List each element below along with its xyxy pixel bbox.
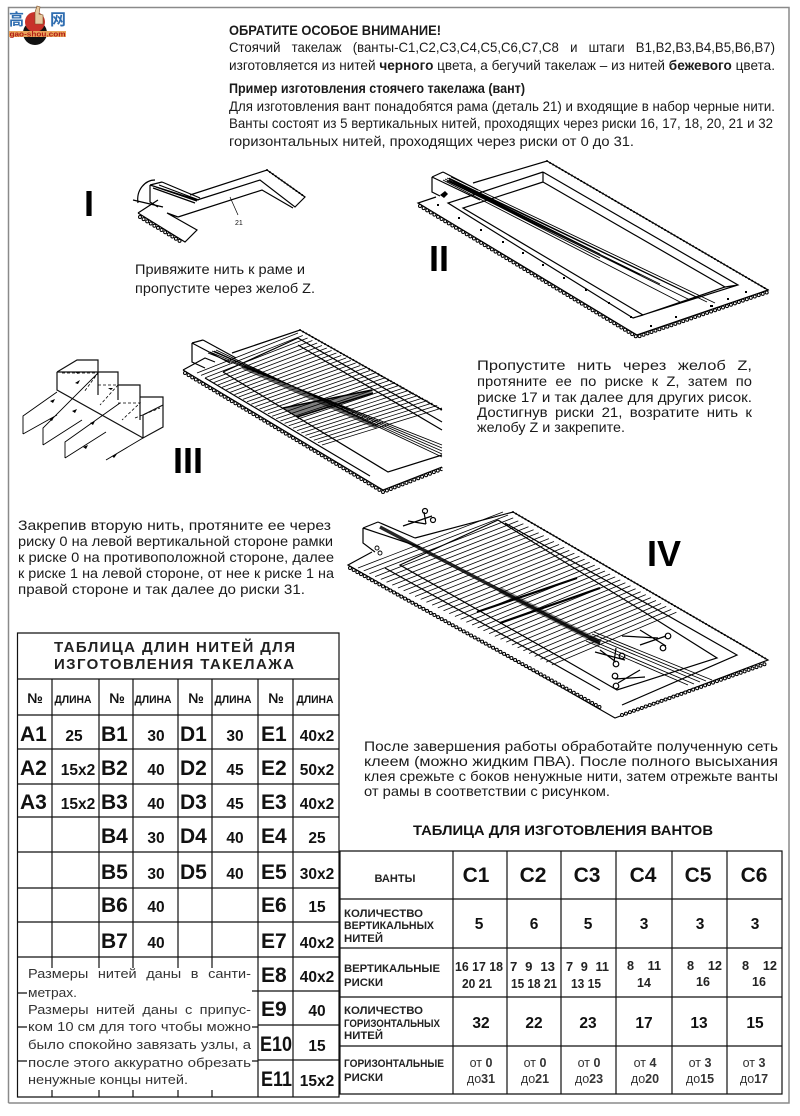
row: horizontal marks	[344, 1056, 768, 1086]
step II text: протяните ее по риске к Z, затем по	[477, 373, 752, 389]
column D: 40	[226, 866, 244, 883]
column D: D5	[180, 861, 207, 884]
row: vertical marks: ВЕРТИКАЛЬНЫЕ	[344, 963, 440, 975]
table: thread lengths	[18, 633, 339, 1097]
row: horizontal marks: до31	[467, 1072, 495, 1086]
table header row: ДЛИНА	[134, 694, 172, 706]
column B: B6	[101, 894, 128, 917]
step IV text: клеем (можно жидким ПВА). После полного высыхания	[364, 753, 778, 769]
row: vertical marks: 7 9 13	[510, 960, 555, 974]
column D: 30	[226, 728, 244, 745]
row: horizontal marks: до15	[686, 1072, 714, 1086]
column E: E5	[261, 861, 287, 884]
column D: D4	[180, 825, 207, 848]
column D	[180, 723, 244, 884]
logo: gao-shou.com	[9, 6, 66, 45]
column B	[101, 723, 165, 953]
row: horizontal thread count: 22	[525, 1015, 543, 1032]
column B: B5	[101, 861, 128, 884]
row: horizontal thread count: КОЛИЧЕСТВО	[344, 1005, 423, 1017]
column E: E11	[261, 1068, 292, 1091]
row: vertical thread count: КОЛИЧЕСТВО	[344, 908, 423, 920]
row: vertical marks: 16	[752, 975, 766, 989]
row: vertical marks: 13 15	[571, 977, 601, 991]
header row: С1	[463, 864, 490, 887]
heading: shroud table: ТАБЛИЦА ДЛЯ ИЗГОТОВЛЕНИЯ ВАНТОВ	[413, 823, 713, 838]
header row	[374, 864, 767, 887]
diagram: thread path over notches	[23, 360, 163, 460]
row: vertical thread count: 5	[475, 916, 484, 933]
column B: 30	[147, 866, 165, 883]
step number IV: IV	[647, 533, 681, 574]
row: horizontal marks: до21	[521, 1072, 549, 1086]
step II text: Достигнув риски 21, возратите нить к	[477, 404, 753, 420]
column B: B7	[101, 930, 128, 953]
step II text: риске 17 и так далее для других рисок.	[477, 389, 752, 405]
row: vertical thread count	[344, 908, 760, 945]
row: horizontal marks: ГОРИЗОНТАЛЬНЫЕ	[344, 1058, 444, 1070]
step IV text	[364, 738, 778, 799]
row: vertical thread count: 3	[751, 916, 760, 933]
scissors: top	[403, 508, 436, 526]
step IV text: После завершения работы обработайте полученную сеть	[364, 738, 778, 754]
diagram IV: frame with threads and scissors	[348, 508, 768, 718]
row: horizontal marks: до17	[740, 1072, 768, 1086]
table: shrouds	[340, 851, 782, 1094]
intro text: special attention	[229, 22, 775, 149]
step III text: правой стороне и так далее до риски 31.	[18, 581, 305, 597]
column A: 15x2	[61, 796, 95, 813]
row: vertical thread count: 5	[584, 916, 593, 933]
column E: E4	[261, 825, 287, 848]
column E: 50x2	[300, 762, 334, 779]
column E: E2	[261, 757, 287, 780]
table note: после этого аккуратно обрезать	[28, 1055, 251, 1070]
intro text: special attention: изготовляется из нитей черного цвета, а бегучий такелаж – из нитей бежевого цвета.	[229, 57, 775, 73]
row: vertical thread count: 6	[530, 916, 539, 933]
table header row: №	[109, 690, 125, 706]
intro text: special attention: Стоячий такелаж (ванты-С1,С2,С3,С4,С5,С6,С7,С8 и штаги В1,В2,В3,В4,В5,В6,В7)	[229, 39, 775, 55]
header row: С3	[574, 864, 600, 887]
column D: D1	[180, 723, 207, 746]
column B: B1	[101, 723, 128, 746]
column E	[260, 723, 334, 1091]
column E: E3	[261, 791, 287, 814]
row: horizontal marks: от 0	[470, 1056, 492, 1070]
intro text: special attention: ОБРАТИТЕ ОСОБОЕ ВНИМАНИЕ!	[229, 22, 441, 38]
row: vertical marks: 14	[637, 976, 651, 990]
table note: метрах.	[28, 985, 77, 1000]
column A: 25	[65, 728, 83, 745]
row: horizontal marks: от 0	[524, 1056, 546, 1070]
table note: Размеры нитей даны в санти-	[28, 966, 251, 981]
header row: С4	[630, 864, 657, 887]
column A	[20, 723, 95, 814]
step II text: Пропустите нить через желоб Z,	[477, 357, 752, 373]
row: vertical marks: 8 12	[687, 959, 722, 973]
scissors: middle	[595, 648, 625, 667]
row: vertical marks: 15 18 21	[511, 977, 557, 991]
header row: С6	[741, 864, 767, 887]
diagram I: frame corner with thread: 21	[235, 220, 243, 227]
step III text: к риске 1 на левой стороне, от нее к риске 1 на	[18, 565, 334, 581]
step number II: II	[429, 238, 449, 279]
logo: gao-shou.com: 网	[50, 12, 66, 29]
step number I: I	[84, 183, 94, 224]
row: vertical thread count: 3	[696, 916, 705, 933]
column E: 40x2	[300, 728, 334, 745]
column A: A3	[20, 791, 47, 814]
caption for step I: пропустите через желоб Z.	[135, 280, 315, 296]
row: horizontal thread count: 23	[579, 1015, 597, 1032]
step IV text: от рамы в соответствии с рисунком.	[364, 783, 610, 799]
row: horizontal marks: до20	[631, 1072, 659, 1086]
scissors: left	[375, 546, 382, 555]
row: horizontal thread count: 32	[472, 1015, 490, 1032]
row: vertical thread count: 3	[640, 916, 649, 933]
header row: С2	[520, 864, 546, 887]
table header row: №	[27, 690, 43, 706]
intro text: special attention: Для изготовления вант понадобятся рама (деталь 21) и входящие в набор черные нити.	[229, 98, 775, 114]
row: horizontal thread count	[344, 1005, 764, 1042]
diagram II: frame with vertical threads	[418, 161, 768, 337]
column A: 15x2	[61, 762, 95, 779]
column B: 40	[147, 796, 165, 813]
step III text: к риске 0 на противоположной стороне, далее	[18, 549, 334, 565]
column D: 45	[226, 796, 244, 813]
step II text	[477, 357, 753, 435]
row: horizontal marks: от 0	[578, 1056, 600, 1070]
column B: 40	[147, 935, 165, 952]
row: horizontal thread count: 17	[635, 1015, 653, 1032]
logo: gao-shou.com: gao-shou.com	[10, 32, 66, 39]
column E: E1	[261, 723, 287, 746]
column D: D3	[180, 791, 207, 814]
column B: B2	[101, 757, 128, 780]
step IV text: клея срежьте с боков ненужные нити, затем отрежьте ванты	[364, 768, 778, 784]
column A: A1	[20, 723, 47, 746]
table note: Размеры нитей даны с припус-	[28, 1002, 251, 1017]
column B: 40	[147, 762, 165, 779]
row: vertical marks: 8 12	[742, 959, 777, 973]
column B: 40	[147, 899, 165, 916]
table header row: ДЛИНА	[296, 694, 334, 706]
step III text: риску 0 на левой вертикальной стороне рамки	[18, 533, 333, 549]
column D: 40	[226, 830, 244, 847]
row: horizontal marks: от 3	[743, 1056, 765, 1070]
table title: ИЗГОТОВЛЕНИЯ ТАКЕЛАЖА	[54, 656, 294, 673]
step II text: желобу Z и закрепите.	[477, 419, 625, 435]
row: horizontal thread count: 13	[690, 1015, 708, 1032]
caption for step I: Привяжите нить к раме и	[135, 261, 305, 277]
intro text: special attention: горизонтальных нитей, проходящих через риски от 0 до 31.	[229, 133, 634, 149]
column E: E10	[260, 1033, 292, 1056]
column B: B3	[101, 791, 128, 814]
logo: gao-shou.com: 高	[9, 10, 24, 29]
row: horizontal marks: РИСКИ	[344, 1072, 383, 1084]
column E: 40x2	[300, 969, 334, 986]
table header row: ДЛИНА	[54, 694, 92, 706]
column E: 15	[308, 899, 326, 916]
row: vertical marks	[344, 959, 777, 991]
row: vertical marks: 8 11	[627, 959, 661, 973]
column B: 30	[147, 728, 165, 745]
column E: 40x2	[300, 796, 334, 813]
row: vertical marks: 20 21	[462, 977, 492, 991]
table note: ненужные концы нитей.	[28, 1072, 188, 1087]
column E: E9	[261, 998, 287, 1021]
table title	[54, 638, 295, 673]
step III text: Закрепив вторую нить, протяните ее через	[18, 517, 331, 533]
column B: 30	[147, 830, 165, 847]
row: horizontal marks: от 3	[689, 1056, 711, 1070]
column E: 25	[308, 830, 326, 847]
diagram III: frame with horizontal threads	[183, 330, 442, 492]
column E: E8	[261, 964, 287, 987]
intro text: special attention: Пример изготовления стоячего такелажа (вант)	[229, 80, 525, 96]
row: horizontal marks: до23	[575, 1072, 603, 1086]
row: vertical thread count: ВЕРТИКАЛЬНЫХ	[344, 920, 435, 932]
column D: 45	[226, 762, 244, 779]
column B: B4	[101, 825, 128, 848]
scissors: bottom	[612, 670, 645, 689]
table header row: №	[268, 690, 284, 706]
column E: 30x2	[300, 866, 334, 883]
table note: ком 10 см для того чтобы можно	[28, 1019, 251, 1034]
column E: 40x2	[300, 935, 334, 952]
row: vertical thread count: НИТЕЙ	[344, 932, 383, 945]
scissors: right	[622, 630, 671, 651]
diagram I: frame corner with thread	[133, 170, 305, 243]
row: vertical marks: 16 17 18	[455, 960, 503, 974]
column A: A2	[20, 757, 47, 780]
row: horizontal thread count: ГОРИЗОНТАЛЬНЫХ	[344, 1018, 441, 1030]
header row: ВАНТЫ	[374, 873, 416, 885]
row: vertical marks: РИСКИ	[344, 977, 383, 989]
row: horizontal thread count: НИТЕЙ	[344, 1029, 383, 1042]
row: vertical marks: 16	[696, 975, 710, 989]
table title: ТАБЛИЦА ДЛИН НИТЕЙ ДЛЯ	[54, 638, 295, 656]
column E: E6	[261, 894, 287, 917]
row: horizontal marks: от 4	[634, 1056, 656, 1070]
header row: С5	[685, 864, 712, 887]
column E: E7	[261, 930, 287, 953]
column D: D2	[180, 757, 207, 780]
caption for step I	[135, 261, 315, 296]
table note: было спокойно завязать узлы, а	[28, 1037, 252, 1052]
row: horizontal thread count: 15	[746, 1015, 764, 1032]
step III text	[18, 517, 334, 597]
column E: 15x2	[300, 1073, 334, 1090]
step number III: III	[173, 440, 203, 481]
intro text: special attention: Ванты состоят из 5 вертикальных нитей, проходящих через риски 16, 17, 18, 20, 21 и 32	[229, 115, 773, 131]
column E: 40	[308, 1003, 326, 1020]
table header row: №	[188, 690, 204, 706]
column E: 15	[308, 1038, 326, 1055]
table header row: ДЛИНА	[214, 694, 252, 706]
table header row	[27, 690, 334, 706]
row: vertical marks: 7 9 11	[566, 960, 609, 974]
table note	[28, 966, 252, 1087]
